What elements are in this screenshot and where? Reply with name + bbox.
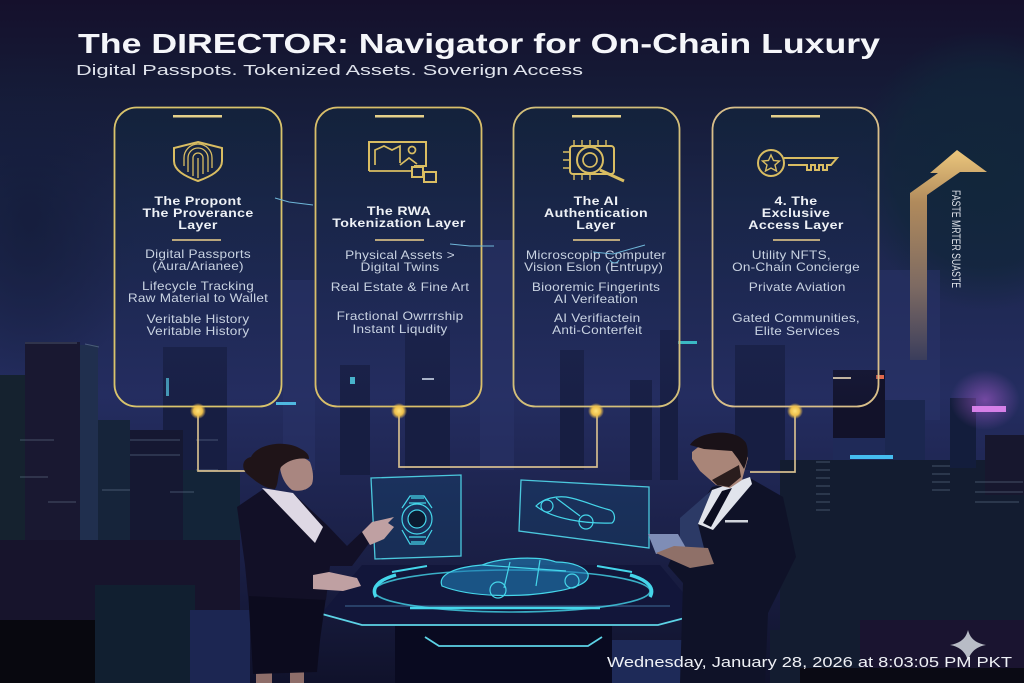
city lights [20, 341, 1023, 510]
text: RWA bullets: Physical Assets > [345, 249, 455, 262]
heading: RWA: The RWA [367, 204, 431, 218]
text: provenance bullets: Lifecycle Tracking [142, 280, 254, 293]
beard [712, 465, 741, 487]
text: provenance bullets: Digital Passports [145, 248, 251, 261]
panel: AI authentication layer [514, 108, 680, 419]
text: RWA bullets: Real Estate & Fine Art [331, 281, 470, 294]
icon: chip under magnifier [563, 140, 624, 181]
tie [703, 488, 732, 527]
heading: provenance: The Proverance [142, 206, 254, 220]
text: provenance bullets: (Aura/Arianee) [152, 260, 244, 273]
heading: RWA: Tokenization Layer [332, 216, 466, 230]
arrow label: FASTE MRTER SUASTE [949, 190, 963, 288]
panel: RWA layer [316, 108, 482, 419]
text: AI bullets: AI Verifiactein [554, 312, 640, 325]
blouse [262, 488, 323, 543]
timestamp: Wednesday, January 28, 2026 at 8:03:05 PM PKT [607, 654, 1012, 671]
heading: AI authentication: The AI [574, 194, 618, 208]
heading: provenance: Layer [178, 218, 218, 232]
tablet [648, 534, 686, 554]
text: access bullets: Utility NFTS, [752, 249, 831, 262]
panel: provenance layer [114, 108, 282, 419]
suit [668, 478, 796, 683]
hologram: platform rings [374, 566, 652, 612]
text: AI bullets: Vision Esion (Entrupy) [524, 261, 663, 274]
figure: man [648, 433, 796, 683]
hands [313, 517, 394, 591]
text: AI bullets: Biooremic Fingerints [532, 281, 660, 294]
icon: watch [402, 496, 432, 544]
connectors: cards to table [198, 411, 795, 472]
text: RWA bullets: Fractional Owrrrship [337, 310, 463, 323]
text: access bullets: Elite Services [754, 325, 840, 338]
text: AI bullets [524, 249, 666, 337]
icon: car outline [536, 497, 614, 529]
icon: tokenized image [369, 142, 436, 182]
legs [256, 668, 304, 683]
jacket [237, 490, 376, 600]
text: access bullets: Gated Communities, [732, 312, 860, 325]
drone streaks [275, 198, 645, 263]
hologram panel: car schematic [519, 480, 649, 548]
icon: sparkle [950, 630, 986, 661]
title: The DIRECTOR: Navigator for On-Chain Luxury [78, 28, 881, 59]
icon: fingerprint shield [174, 142, 222, 181]
hologram: car [441, 558, 588, 598]
face [280, 457, 313, 491]
lower-right districts [612, 370, 1024, 683]
text: RWA bullets [331, 249, 470, 336]
arrow: growth [910, 150, 987, 360]
heading: provenance: The Propont [154, 194, 242, 208]
hologram panel: watch [371, 475, 461, 559]
heading: exclusive access [748, 194, 844, 232]
text: access bullets: Private Aviation [749, 281, 846, 294]
text: provenance bullets [128, 248, 268, 338]
shirt [698, 477, 752, 530]
holographic table [322, 558, 700, 683]
hair [243, 444, 309, 489]
heading: provenance [142, 194, 254, 232]
text: RWA bullets: Digital Twins [361, 261, 439, 274]
lower-left districts [0, 342, 250, 683]
hair [690, 433, 748, 469]
lapel panel [680, 490, 712, 552]
heading: RWA [332, 204, 466, 230]
figure: woman [237, 444, 394, 683]
heading: AI authentication: Layer [576, 218, 616, 232]
heading: exclusive access: Exclusive [762, 206, 830, 220]
hand [656, 546, 714, 568]
text: RWA bullets: Instant Liqudity [353, 323, 448, 336]
face [692, 444, 748, 488]
skirt [248, 590, 327, 674]
text: AI bullets: Anti-Conterfeit [552, 324, 643, 337]
text: AI bullets: Microscopip Computer [526, 249, 666, 262]
text: access bullets [732, 249, 860, 338]
heading: exclusive access: Access Layer [748, 218, 844, 232]
text: AI bullets: AI Verifeation [554, 293, 638, 306]
subtitle: Digital Passpots. Tokenized Assets. Soverign Access [76, 62, 583, 79]
panel: exclusive access layer [712, 108, 878, 419]
text: provenance bullets: Veritable History [147, 325, 250, 338]
heading: exclusive access: 4. The [774, 194, 818, 208]
heading: AI authentication: Authentication [544, 206, 648, 220]
icon: star key [758, 150, 837, 176]
text: provenance bullets: Veritable History [147, 313, 250, 326]
background: city skyline [0, 240, 1024, 683]
text: access bullets: On-Chain Concierge [732, 261, 860, 274]
text: provenance bullets: Raw Material to Wallet [128, 292, 268, 305]
heading: AI authentication [544, 194, 648, 232]
